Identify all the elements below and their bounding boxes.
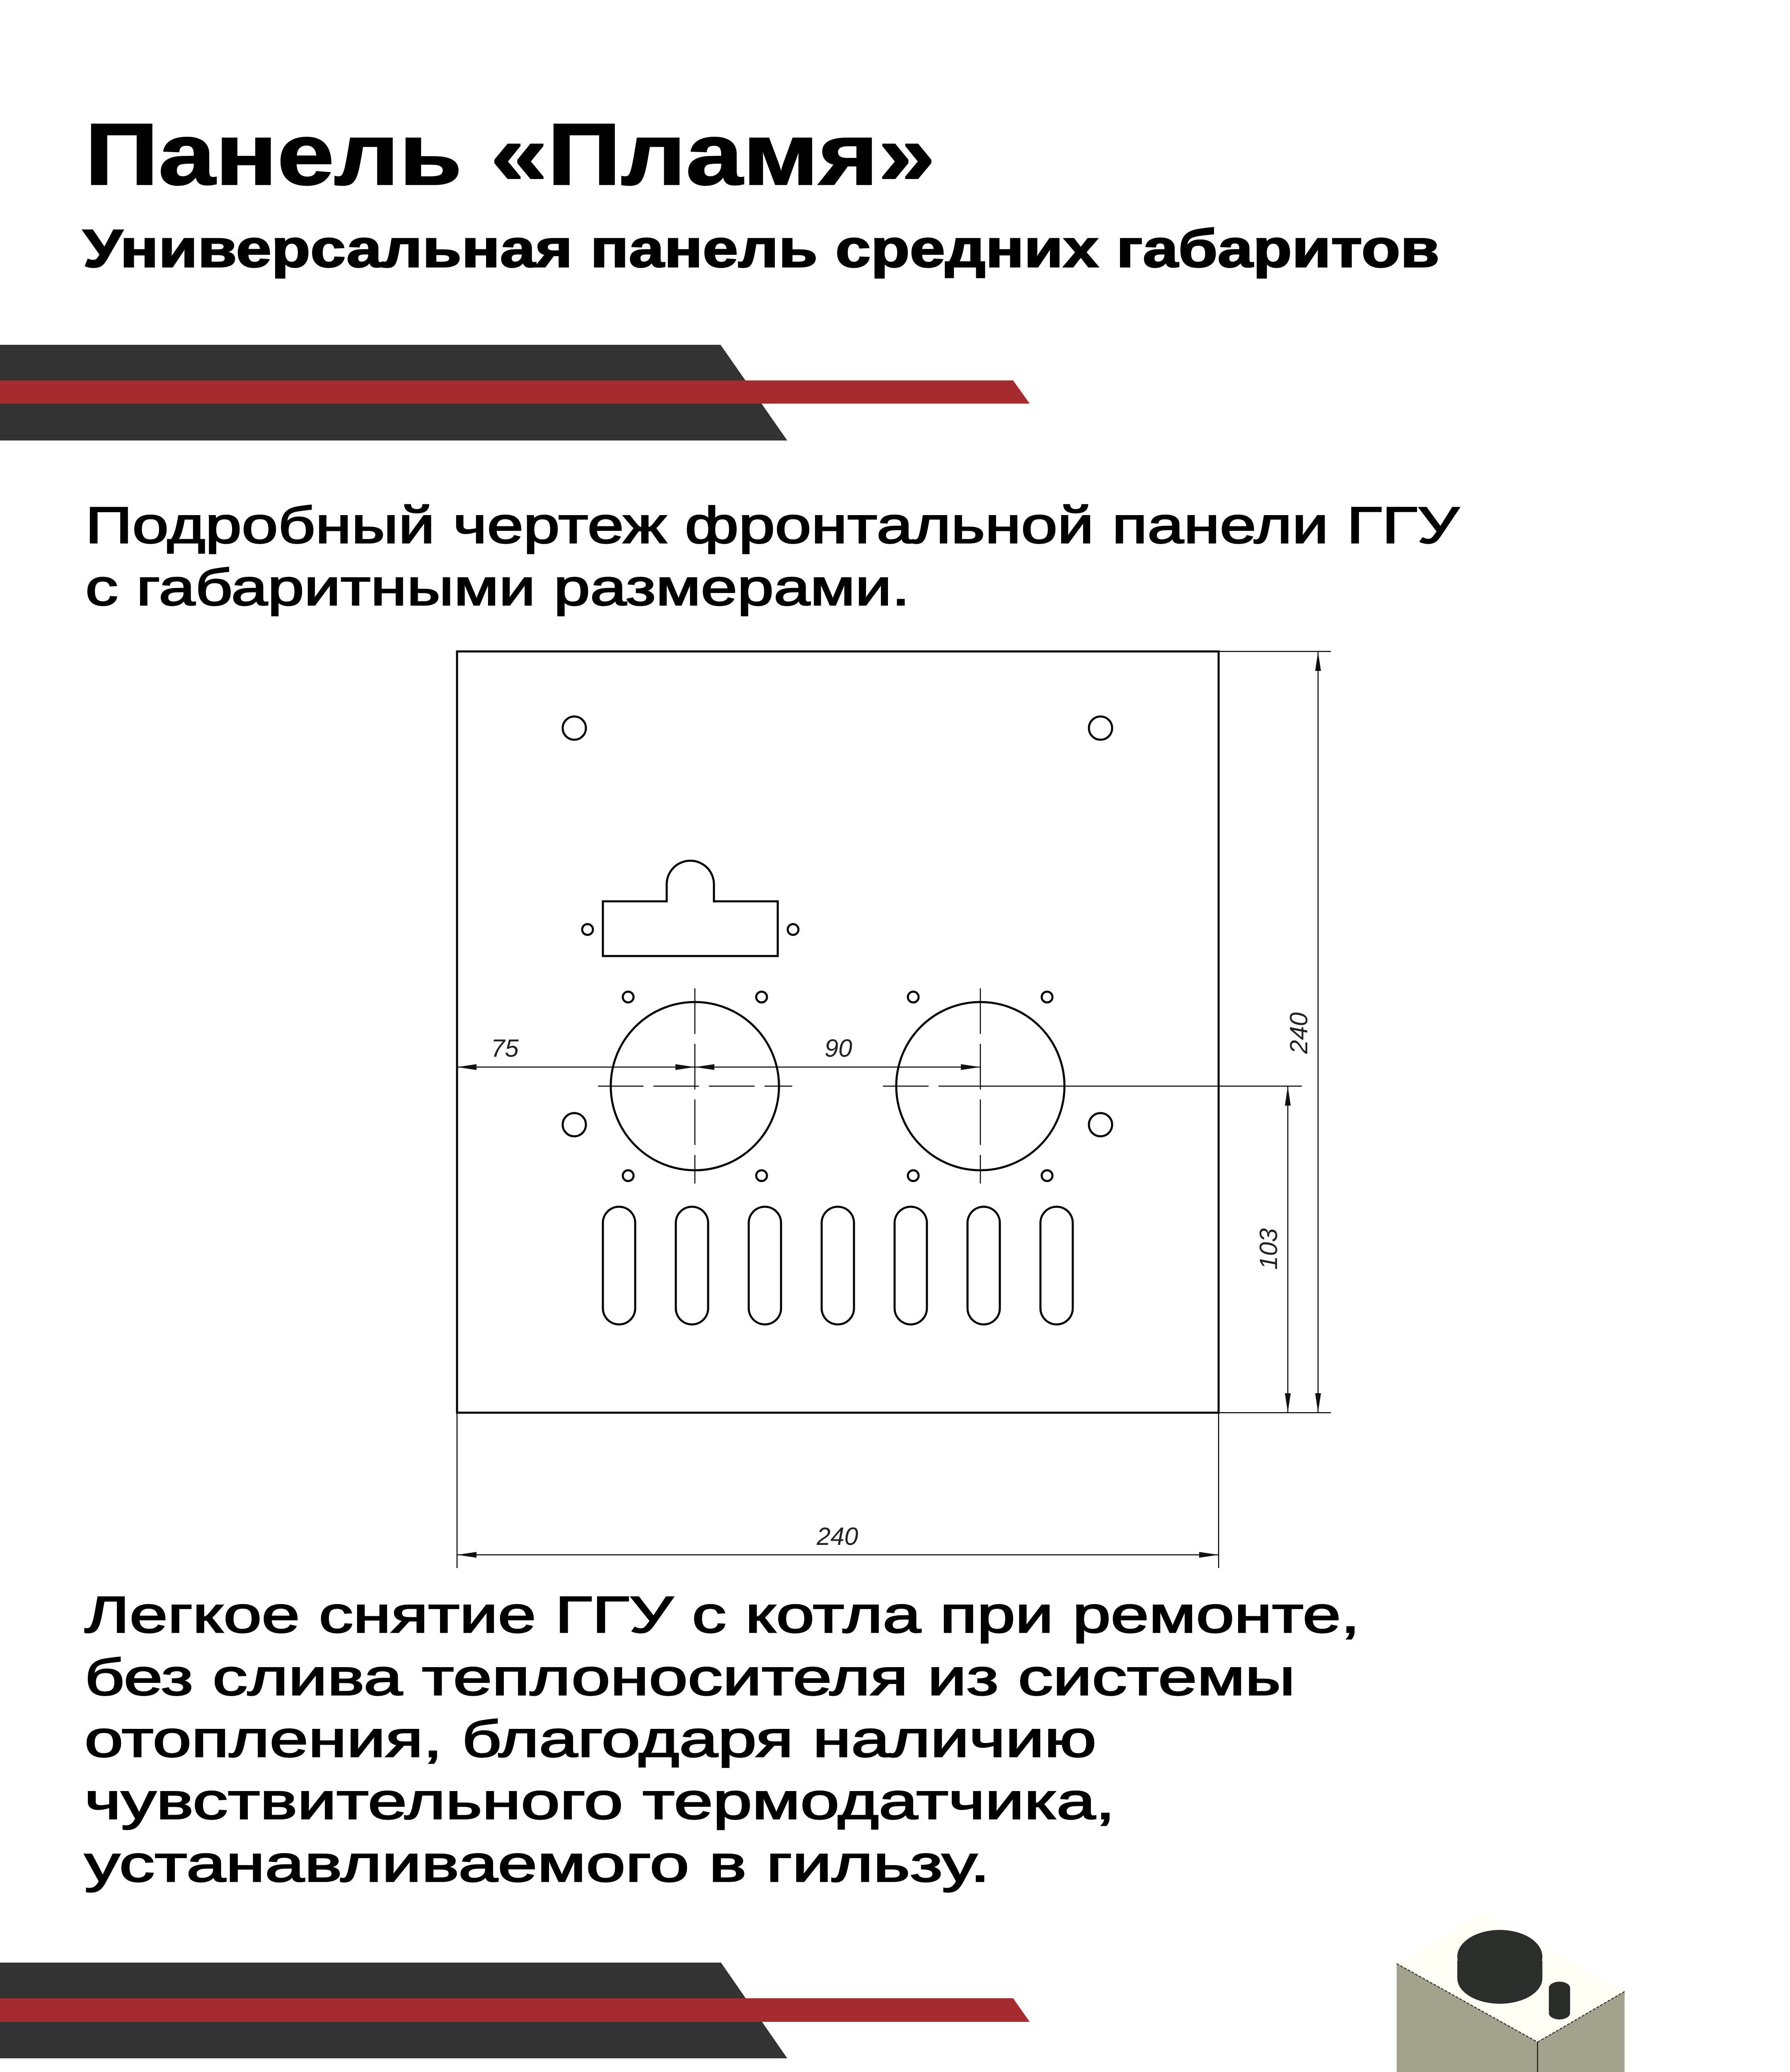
text block: easy removal: Легкое снятие ГГУ с котла при ремонте,: [85, 1586, 1360, 1644]
dimension label: 240 vertical: 240: [1285, 1012, 1313, 1054]
intro text block: [85, 497, 1460, 616]
text block: easy removal: [85, 1586, 1360, 1893]
burner circles with screw holes: [611, 992, 1064, 1181]
decorative band: top: [0, 345, 1030, 441]
dimension label: 103: 103: [1255, 1228, 1282, 1270]
intro text block: с габаритными размерами.: [85, 559, 910, 616]
text block: easy removal: чувствительного термодатчика,: [85, 1773, 1115, 1830]
text block: easy removal: отопления, благодаря наличию: [85, 1711, 1096, 1768]
panel outline: [457, 651, 1219, 1413]
small knob: [1549, 1982, 1570, 2019]
dimension lines: [457, 651, 1331, 1568]
dimension label: 90: 90: [825, 1034, 852, 1062]
center lines: [598, 988, 1302, 1184]
text block: easy removal: устанавливаемого в гильзу.: [85, 1835, 990, 1893]
dimension arrows: [457, 651, 1321, 1558]
title: Панель «Пламя»: [85, 105, 935, 203]
dimension label: 75: 75: [491, 1034, 519, 1062]
air slots: [603, 1207, 1073, 1324]
control box: [1397, 1912, 1625, 2072]
keyhole opening: [582, 861, 798, 956]
subtitle: Универсальная панель средних габаритов: [83, 219, 1439, 278]
mounting holes: [563, 716, 1112, 1136]
text block: easy removal: без слива теплоносителя из системы: [85, 1649, 1295, 1706]
illustration: gas burner unit: [1362, 1912, 1790, 2072]
large knob: [1457, 1930, 1542, 2004]
dimension label: 240 horizontal: 240: [816, 1523, 858, 1550]
decorative band: middle: [0, 1963, 1030, 2058]
intro text block: Подробный чертеж фронтальной панели ГГУ: [85, 497, 1460, 554]
technical drawing: front panel: [457, 651, 1331, 1568]
